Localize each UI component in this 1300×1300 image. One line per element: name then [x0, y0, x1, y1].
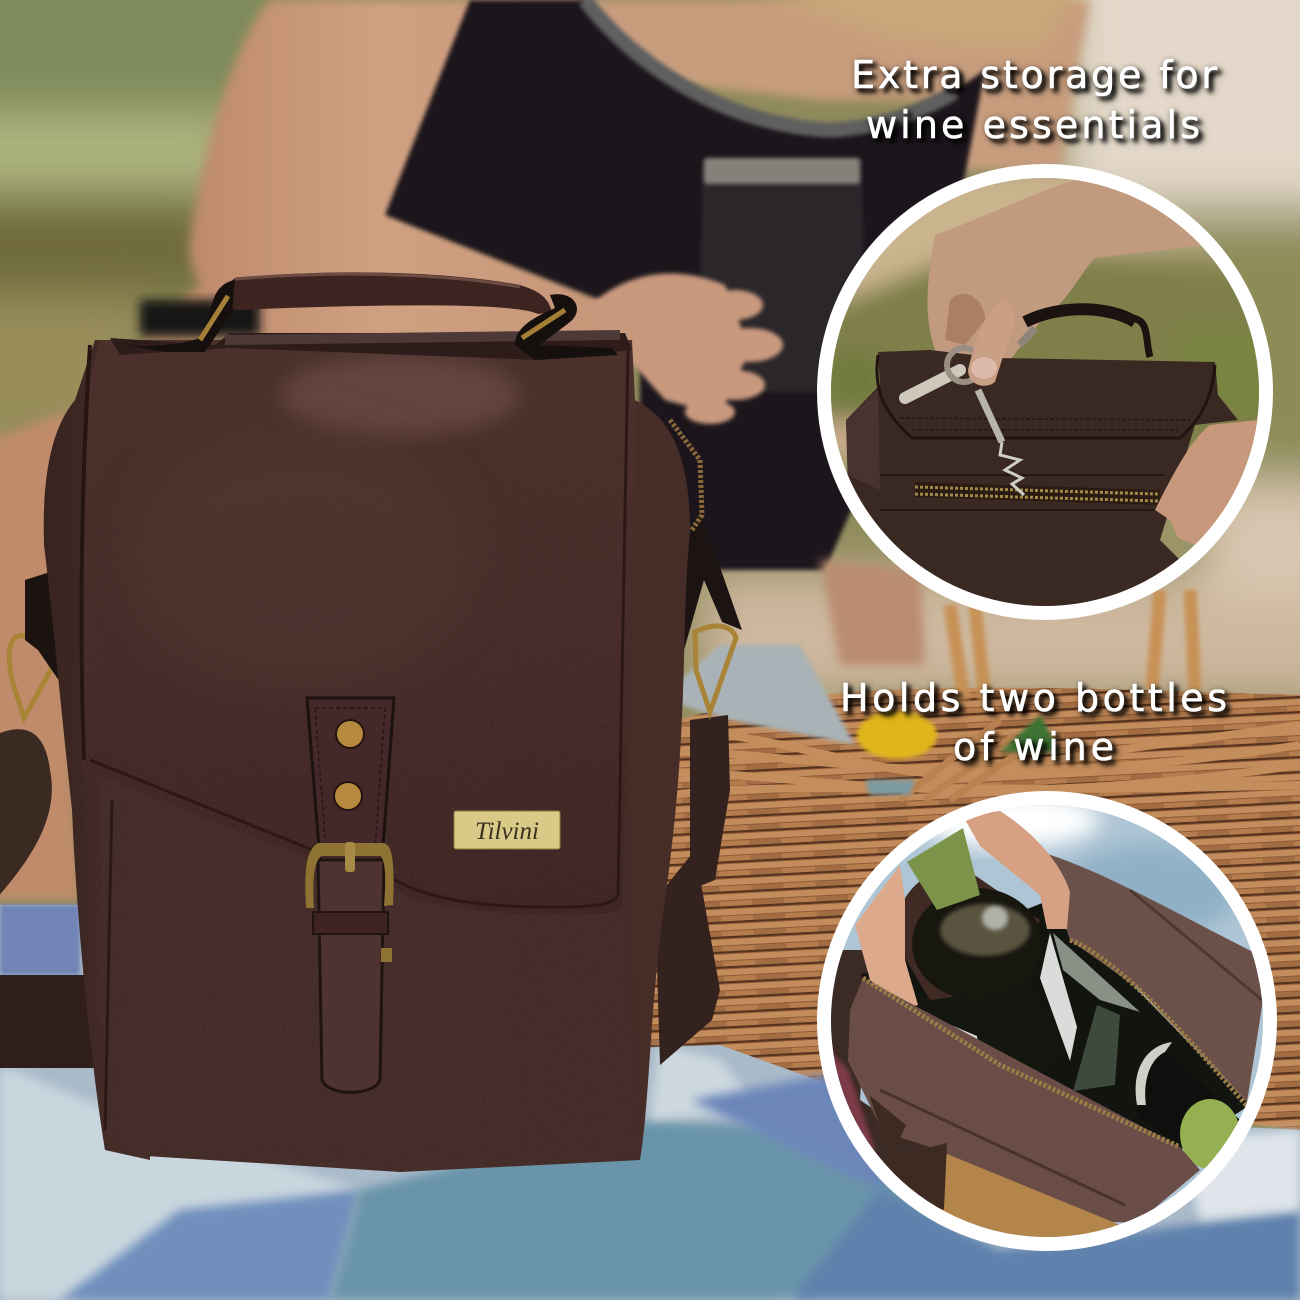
leather grain [221, 1160, 222, 1161]
bag side gusset right [600, 395, 690, 1160]
handle [228, 272, 552, 314]
forearm and hand [928, 180, 1201, 358]
lemon and leaf [857, 711, 937, 759]
main leather bag [44, 272, 702, 1180]
circle inset: corkscrew in zip pocket [817, 164, 1280, 620]
brand plate [454, 811, 560, 849]
strap foot [869, 1095, 947, 1210]
small bottle [1236, 1116, 1240, 1126]
shoulder strap [0, 510, 742, 1068]
lid top [110, 333, 632, 360]
foil insulation [1053, 933, 1140, 1012]
brand plate: Tilvini [475, 818, 539, 845]
mini bag handle [1025, 309, 1135, 322]
left thigh [0, 410, 80, 900]
zipper [915, 482, 1160, 505]
bag lid [1047, 854, 1263, 1102]
caption: holds two bottles: of wine [953, 725, 1114, 769]
clasp right [695, 626, 736, 712]
caption: holds two bottles [840, 676, 1227, 769]
handle rings [110, 280, 235, 352]
leg [820, 560, 925, 665]
caption: holds two bottles: Holds two bottles [840, 676, 1227, 720]
caption: extra storage: Extra storage for [851, 53, 1217, 97]
purple fabric [833, 1051, 876, 1151]
picnic basket [650, 590, 1300, 1130]
bag front [848, 978, 1200, 1223]
lower strap [318, 860, 384, 1092]
hand holding tumbler [585, 273, 783, 424]
bag seams [105, 800, 112, 1130]
bag body [100, 760, 640, 1172]
tumbler [700, 160, 864, 392]
black tank top [385, 0, 985, 570]
bag interior [860, 900, 1250, 1150]
bag front flap [80, 340, 636, 915]
thumb [968, 348, 1002, 386]
green capsule [907, 828, 980, 910]
corkscrew [905, 370, 960, 398]
woman seated behind the bag [0, 0, 1090, 900]
caption: extra storage: wine essentials [866, 103, 1200, 147]
bag side gusset left [44, 340, 150, 1160]
buckle [305, 843, 394, 908]
flap stitching [90, 350, 628, 907]
rivets [336, 720, 364, 748]
large bottle [917, 960, 1070, 1072]
circle inset: bottles in open bag [817, 790, 1290, 1260]
arm [140, 0, 620, 340]
clasp left [9, 635, 52, 718]
napkin [680, 645, 855, 745]
wood floor [930, 1147, 1119, 1237]
basket handles [950, 590, 1195, 700]
strap tab [307, 698, 394, 860]
picnic blanket [0, 905, 1300, 1300]
flap sheen [280, 355, 520, 435]
right hand [1155, 420, 1258, 545]
lower left backdrop [831, 950, 930, 1202]
mini bag [846, 350, 1238, 620]
hands [963, 811, 1070, 929]
caption: extra storage [851, 53, 1217, 147]
